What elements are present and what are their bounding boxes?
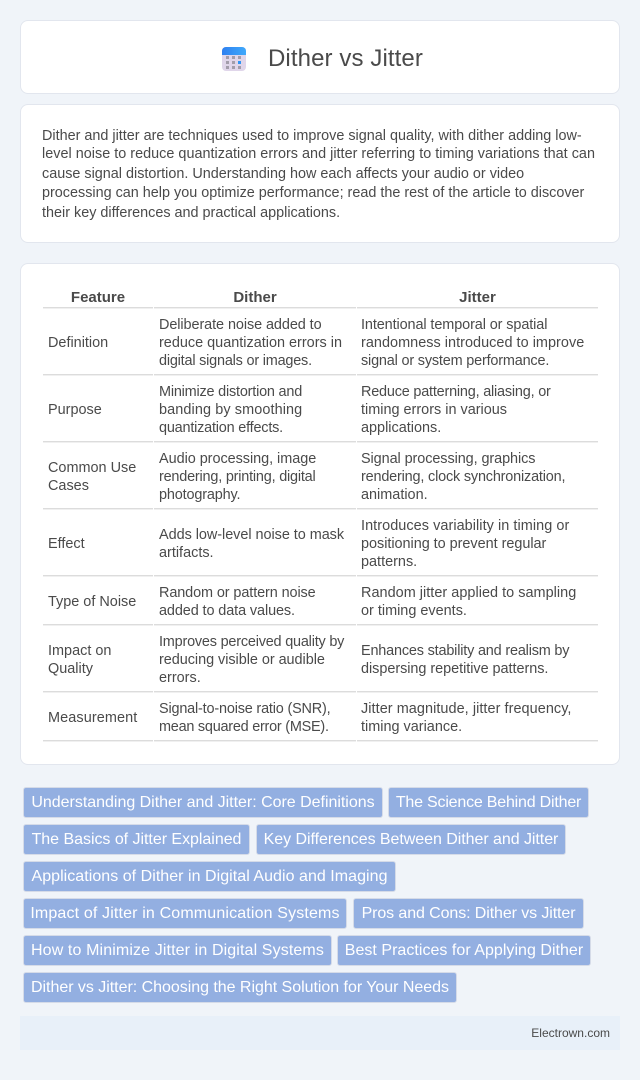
tag: The Science Behind Dither <box>396 794 581 811</box>
comparison table panel: Reduce patterning, aliasing, or <box>361 384 551 400</box>
comparison table panel: reduce quantization errors in <box>159 335 342 351</box>
comparison table panel: patterns. <box>361 554 417 570</box>
comparison table panel: mean squared error (MSE). <box>159 719 329 735</box>
table header: Jitter: Jitter <box>459 289 496 306</box>
row: Definition: Definition <box>48 335 108 351</box>
comparison table panel: Improves perceived quality by <box>159 634 344 650</box>
tag <box>353 898 584 929</box>
intro panel: their key differences and practical applications. <box>42 205 340 221</box>
comparison table panel: Adds low-level noise to mask <box>159 527 344 543</box>
row: Common Use Cases: Common Use <box>48 460 136 476</box>
topic tags <box>23 787 591 1003</box>
tag <box>23 898 347 929</box>
comparison table panel: Cases <box>48 478 89 494</box>
comparison table panel: digital signals or images. <box>159 353 312 369</box>
icon: calendar <box>222 47 246 71</box>
comparison table panel: reducing visible or audible <box>159 652 325 668</box>
tag <box>23 972 457 1003</box>
tag: How to Minimize Jitter in Digital Systems <box>31 942 324 959</box>
table header: Dither: Dither <box>233 289 277 306</box>
table header: Feature: Feature <box>71 289 125 306</box>
comparison table panel: photography. <box>159 487 240 503</box>
tag: The Basics of Jitter Explained <box>32 831 241 848</box>
intro panel: level noise to reduce quantization errors and jitter referring to timing variations that can <box>42 146 595 162</box>
row: Purpose: Purpose <box>48 402 102 418</box>
comparison table panel: Random jitter applied to sampling <box>361 585 576 601</box>
comparison table panel: Signal processing, graphics <box>361 451 535 467</box>
tag <box>23 935 332 966</box>
comparison table panel: Deliberate noise added to <box>159 317 322 333</box>
tag <box>256 824 566 855</box>
intro panel: processing can help you optimize performance; read the rest of the article to discover <box>42 185 584 201</box>
footer credit: Electrown.com <box>531 1026 610 1040</box>
comparison table panel: Intentional temporal or spatial <box>361 317 547 333</box>
row: Effect: Effect <box>48 536 85 552</box>
comparison table panel: applications. <box>361 420 441 436</box>
comparison table panel: rendering, clock synchronization, <box>361 469 565 485</box>
comparison table panel: Enhances stability and realism by <box>361 643 569 659</box>
intro panel: cause signal distortion. Understanding how each affects your audio or video <box>42 166 524 182</box>
comparison table panel: Quality <box>48 661 93 677</box>
comparison table panel: signal or system performance. <box>361 353 549 369</box>
row: Impact on Quality: Impact on <box>48 643 111 659</box>
comparison table panel: Signal-to-noise ratio (SNR), <box>159 701 330 717</box>
header card <box>20 20 620 94</box>
tag <box>337 935 591 966</box>
tag: Key Differences Between Dither and Jitter <box>264 831 558 848</box>
footer <box>20 1016 620 1050</box>
comparison table panel: added to data values. <box>159 603 295 619</box>
comparison table panel: Audio processing, image <box>159 451 316 467</box>
tag <box>23 824 250 855</box>
comparison table panel: banding by smoothing <box>159 402 302 418</box>
tag: Impact of Jitter in Communication Systems <box>30 905 340 922</box>
tag <box>23 861 396 892</box>
comparison table panel: positioning to prevent regular <box>361 536 546 552</box>
comparison table panel: Minimize distortion and <box>159 384 302 400</box>
comparison table panel: Introduces variability in timing or <box>361 518 569 534</box>
comparison table panel: timing errors in various <box>361 402 507 418</box>
comparison table panel: or timing events. <box>361 603 467 619</box>
intro panel <box>20 104 620 243</box>
comparison table panel: quantization effects. <box>159 420 283 436</box>
comparison table panel <box>20 263 620 765</box>
intro panel: Dither and jitter are techniques used to improve signal quality, with dither adding low- <box>42 128 582 144</box>
tag: Understanding Dither and Jitter: Core Definitions <box>31 794 375 811</box>
row: Measurement: Measurement <box>48 710 137 726</box>
comparison table panel: animation. <box>361 487 428 503</box>
tag <box>388 787 589 818</box>
comparison table panel: dispersing repetitive patterns. <box>361 661 548 677</box>
comparison table panel: timing variance. <box>361 719 462 735</box>
comparison table panel: errors. <box>159 670 201 686</box>
comparison table panel: artifacts. <box>159 545 214 561</box>
tag: Dither vs Jitter: Choosing the Right Solution for Your Needs <box>31 979 449 996</box>
comparison table panel: Jitter magnitude, jitter frequency, <box>361 701 571 717</box>
comparison table panel: rendering, printing, digital <box>159 469 316 485</box>
title: Dither vs Jitter <box>268 45 423 72</box>
tag: Applications of Dither in Digital Audio and Imaging <box>31 868 388 885</box>
tag: Best Practices for Applying Dither <box>345 942 583 959</box>
tag <box>23 787 383 818</box>
tag: Pros and Cons: Dither vs Jitter <box>362 905 575 922</box>
comparison table panel: Random or pattern noise <box>159 585 316 601</box>
comparison table panel: randomness introduced to improve <box>361 335 584 351</box>
row: Type of Noise: Type of Noise <box>48 594 136 610</box>
